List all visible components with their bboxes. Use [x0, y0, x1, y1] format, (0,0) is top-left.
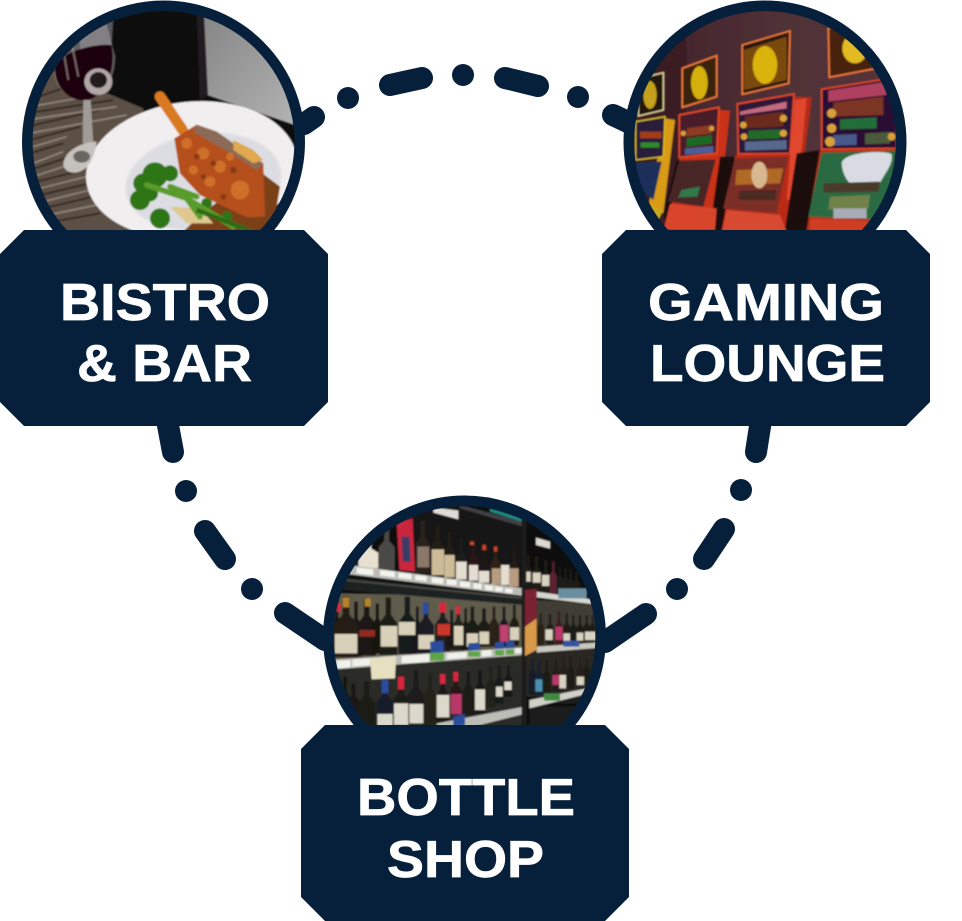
machine bodies	[648, 118, 675, 213]
heading: bottle: BOTTLE	[357, 769, 575, 827]
bottom row bottles	[339, 665, 512, 730]
label plaque: bottle shop	[301, 725, 629, 921]
bottom shelf	[435, 706, 523, 725]
photo: gaming machines	[634, 11, 896, 230]
heading: shop: SHOP	[387, 831, 544, 889]
circle frame: gaming	[629, 6, 901, 278]
lower screens	[636, 162, 662, 200]
heading: and bar: & BAR	[77, 335, 252, 393]
heading: lounge: LOUNGE	[650, 335, 885, 393]
dashed connector: bistro to gaming	[304, 75, 632, 124]
heading: bistro: BISTRO	[60, 274, 270, 332]
middle row bottles	[331, 597, 519, 657]
shelf two	[335, 647, 524, 669]
right bay bottles	[525, 555, 596, 730]
top row bottles	[358, 518, 519, 587]
dashed connector: bistro to bottle shop	[167, 420, 325, 640]
circle frame: bistro	[27, 6, 300, 278]
dashed connector: gaming to bottle shop	[605, 420, 761, 642]
post and sign	[522, 518, 526, 730]
upper screens	[636, 117, 665, 160]
heading: gaming: GAMING	[648, 274, 884, 332]
label plaque: gaming lounge	[602, 230, 930, 426]
circle frame: bottle shop	[328, 501, 601, 773]
photo: bistro plate and wine	[32, 11, 294, 230]
photo: bottle shop shelves	[334, 506, 596, 725]
top boxes	[638, 73, 663, 116]
shelf one	[347, 565, 524, 596]
label plaque: bistro and bar	[0, 230, 328, 426]
right bay shelves	[537, 592, 592, 604]
